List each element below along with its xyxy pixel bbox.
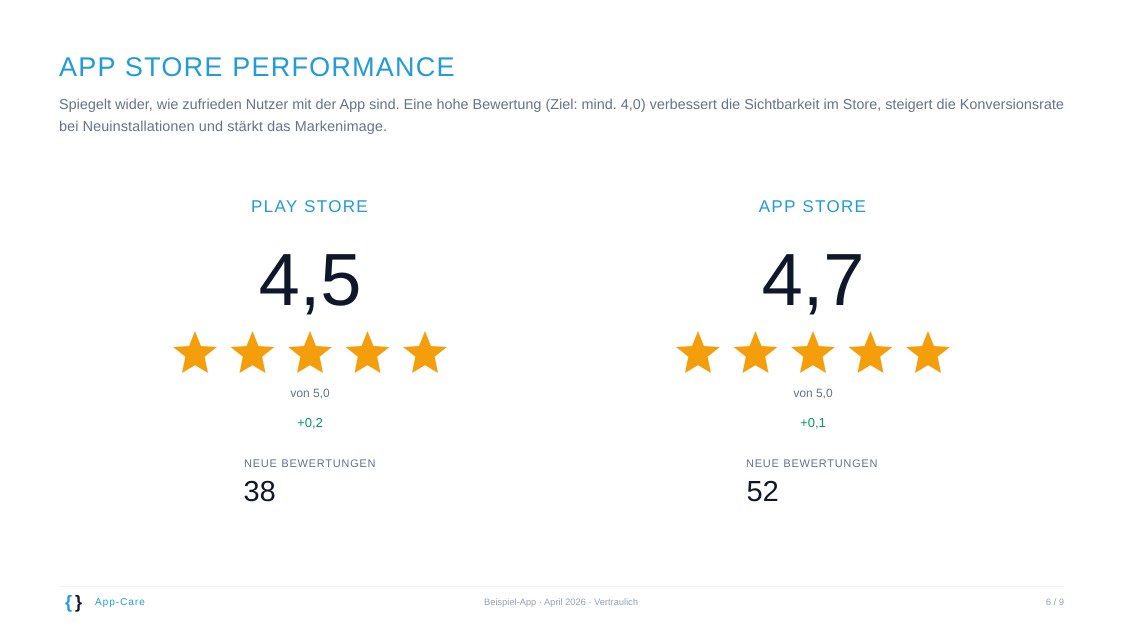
icon: braces: {} (65, 592, 82, 612)
description text: bei Neuinstallationen und stärkt das Markenimage. (59, 119, 387, 135)
description text: Spiegelt wider, wie zufrieden Nutzer mit der App sind. Eine hohe Bewertung (Ziel: mind. 4,0) verbessert die Sichtbarkeit im Store, steigert die Konversionsrate (59, 97, 1064, 113)
new reviews label: NEUE BEWERTUNGEN (244, 458, 376, 470)
page number: 6 / 9 (1046, 597, 1064, 607)
footer logo (65, 592, 146, 612)
star rating (173, 331, 447, 373)
star rating (676, 331, 950, 373)
brand name: App-Care (95, 597, 146, 608)
scale note: von 5,0 (793, 386, 833, 400)
panel: play store (173, 197, 447, 508)
new reviews value: 38 (244, 476, 276, 508)
new reviews label: NEUE BEWERTUNGEN (746, 458, 878, 470)
store heading: play store: PLAY STORE (251, 197, 369, 216)
rating value: 4,7 (762, 238, 864, 321)
new reviews value: 52 (746, 476, 779, 508)
store heading: app store: APP STORE (759, 197, 867, 216)
panel: app store (676, 197, 950, 508)
description text (59, 97, 1064, 135)
rating change: +0,2 (297, 415, 323, 430)
scale note: von 5,0 (290, 386, 330, 400)
rating value: 4,5 (259, 238, 361, 321)
title: APP STORE PERFORMANCE (59, 52, 456, 82)
rating change: +0,1 (800, 415, 826, 430)
footer center text: Beispiel-App · April 2026 · Vertraulich (484, 597, 638, 607)
